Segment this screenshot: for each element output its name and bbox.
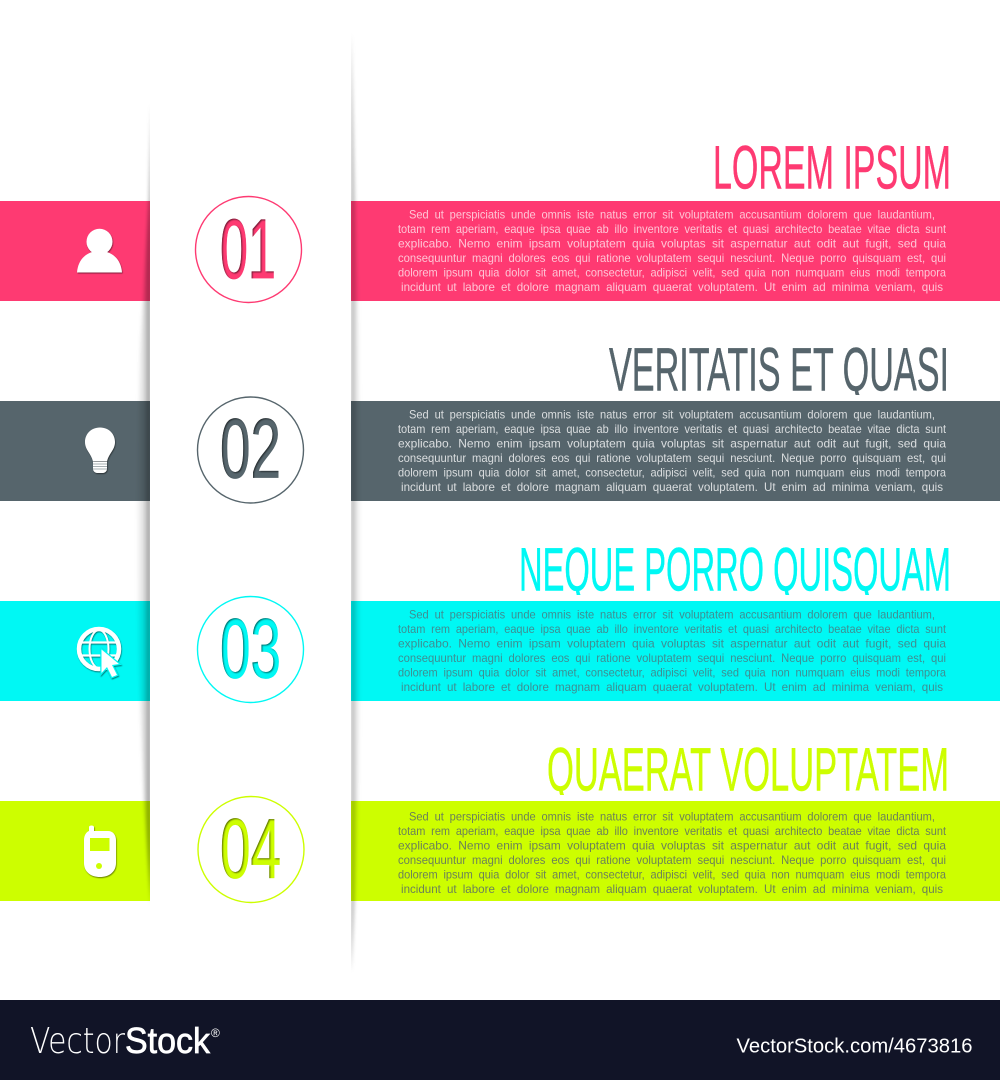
text block: row 2 body: explicabo. Nemo enim ipsam voluptatem quia voluptas sit aspernatur aut odit aut fugit, sed quia: [398, 436, 946, 450]
text block: row 4 body: incidunt ut labore et dolore magnam aliquam quaerat voluptatem. Ut enim ad minima veniam, quis: [401, 882, 943, 896]
icon: light bulb: [85, 428, 115, 473]
text block: row 1 body: incidunt ut labore et dolore magnam aliquam quaerat voluptatem. Ut enim ad minima veniam, quis: [401, 280, 943, 294]
badge 04: [198, 796, 304, 902]
panel: row 4 quaerat voluptatem: [0, 736, 1000, 901]
text block: row 2 body: incidunt ut labore et dolore magnam aliquam quaerat voluptatem. Ut enim ad minima veniam, quis: [401, 480, 943, 494]
text block: row 3 body: [398, 607, 947, 694]
text block: row 3 body: dolorem ipsum quia dolor sit amet, consectetur, adipisci velit, sed quia non numquam eius modi tempora: [398, 665, 946, 679]
panel: row 2 veritatis et quasi: [0, 336, 1000, 501]
right band cyan: [351, 601, 1000, 701]
logo: VectorStock: Stock: [125, 1020, 211, 1061]
right band lime: [351, 801, 1000, 901]
left band lime: [0, 801, 151, 901]
text block: row 3 body: explicabo. Nemo enim ipsam voluptatem quia voluptas sit aspernatur aut odit aut fugit, sed quia: [398, 636, 946, 650]
left band pink: [0, 201, 151, 301]
text block: row 2 body: dolorem ipsum quia dolor sit amet, consectetur, adipisci velit, sed quia non numquam eius modi tempora: [398, 465, 946, 479]
badge 02: [198, 397, 304, 503]
text block: row 4 body: Sed ut perspiciatis unde omnis iste natus error sit voluptatem accusantium dolorem que laudantium,: [409, 809, 935, 823]
right band gray: [351, 401, 1000, 501]
text block: row 4 body: dolorem ipsum quia dolor sit amet, consectetur, adipisci velit, sed quia non numquam eius modi tempora: [398, 867, 946, 881]
text block: row 3 body: consequuntur magni dolores eos qui ratione voluptatem sequi nesciunt. Neque porro quisquam est, qui: [398, 651, 946, 665]
number 03: 03: [220, 602, 281, 696]
number 04: 04: [220, 802, 281, 896]
text block: row 1 body: dolorem ipsum quia dolor sit amet, consectetur, adipisci velit, sed quia non numquam eius modi tempora: [398, 265, 946, 279]
number 02: 02: [220, 402, 281, 496]
logo: VectorStock: ®: [211, 1026, 220, 1040]
text block: row 4 body: explicabo. Nemo enim ipsam voluptatem quia voluptas sit aspernatur aut odit aut fugit, sed quia: [398, 838, 946, 852]
text block: row 4 body: totam rem aperiam, eaque ipsa quae ab illo inventore veritatis et quasi architecto beatae vitae dicta sunt: [398, 824, 947, 838]
panel: row 1 lorem ipsum: [0, 134, 1000, 301]
text block: row 2 body: Sed ut perspiciatis unde omnis iste natus error sit voluptatem accusantium dolorem que laudantium,: [409, 407, 935, 421]
text block: row 3 body: Sed ut perspiciatis unde omnis iste natus error sit voluptatem accusantium dolorem que laudantium,: [409, 607, 935, 621]
text block: row 4 body: consequuntur magni dolores eos qui ratione voluptatem sequi nesciunt. Neque porro quisquam est, qui: [398, 853, 946, 867]
column left shadow: [136, 103, 151, 905]
text block: row 3 body: totam rem aperiam, eaque ipsa quae ab illo inventore veritatis et quasi architecto beatae vitae dicta sunt: [398, 622, 947, 636]
text block: row 2 body: [398, 407, 947, 494]
footer bar: [0, 1000, 1000, 1080]
right band pink: [351, 201, 1000, 301]
logo: VectorStock: [30, 1020, 220, 1062]
column right shadow: [351, 33, 361, 972]
text block: row 1 body: [398, 207, 947, 294]
icon: person: [77, 229, 122, 272]
text block: row 1 body: Sed ut perspiciatis unde omnis iste natus error sit voluptatem accusantium dolorem que laudantium,: [409, 207, 935, 221]
text block: row 1 body: explicabo. Nemo enim ipsam voluptatem quia voluptas sit aspernatur aut odit aut fugit, sed quia: [398, 236, 946, 250]
logo: VectorStock: Vector: [30, 1021, 125, 1062]
text block: row 2 body: consequuntur magni dolores eos qui ratione voluptatem sequi nesciunt. Neque porro quisquam est, qui: [398, 451, 946, 465]
panel: center white column: [150, 0, 351, 1000]
left band gray: [0, 401, 151, 501]
icon: mobile phone: [84, 826, 116, 877]
text block: row 1 body: totam rem aperiam, eaque ipsa quae ab illo inventore veritatis et quasi architecto beatae vitae dicta sunt: [398, 222, 947, 236]
text block: row 1 body: consequuntur magni dolores eos qui ratione voluptatem sequi nesciunt. Neque porro quisquam est, qui: [398, 251, 946, 265]
text block: row 3 body: incidunt ut labore et dolore magnam aliquam quaerat voluptatem. Ut enim ad minima veniam, quis: [401, 680, 943, 694]
number 01: 01: [220, 202, 276, 296]
panel: row 3 neque porro quisquam: [0, 536, 1000, 701]
footer url: VectorStock.com/4673816: [736, 1036, 972, 1058]
text block: row 4 body: [398, 809, 947, 896]
badge 01: [196, 196, 302, 302]
text block: row 2 body: totam rem aperiam, eaque ipsa quae ab illo inventore veritatis et quasi architecto beatae vitae dicta sunt: [398, 422, 947, 436]
left band cyan: [0, 601, 151, 701]
badge 03: [198, 596, 304, 702]
icon: globe with cursor: [79, 629, 119, 677]
